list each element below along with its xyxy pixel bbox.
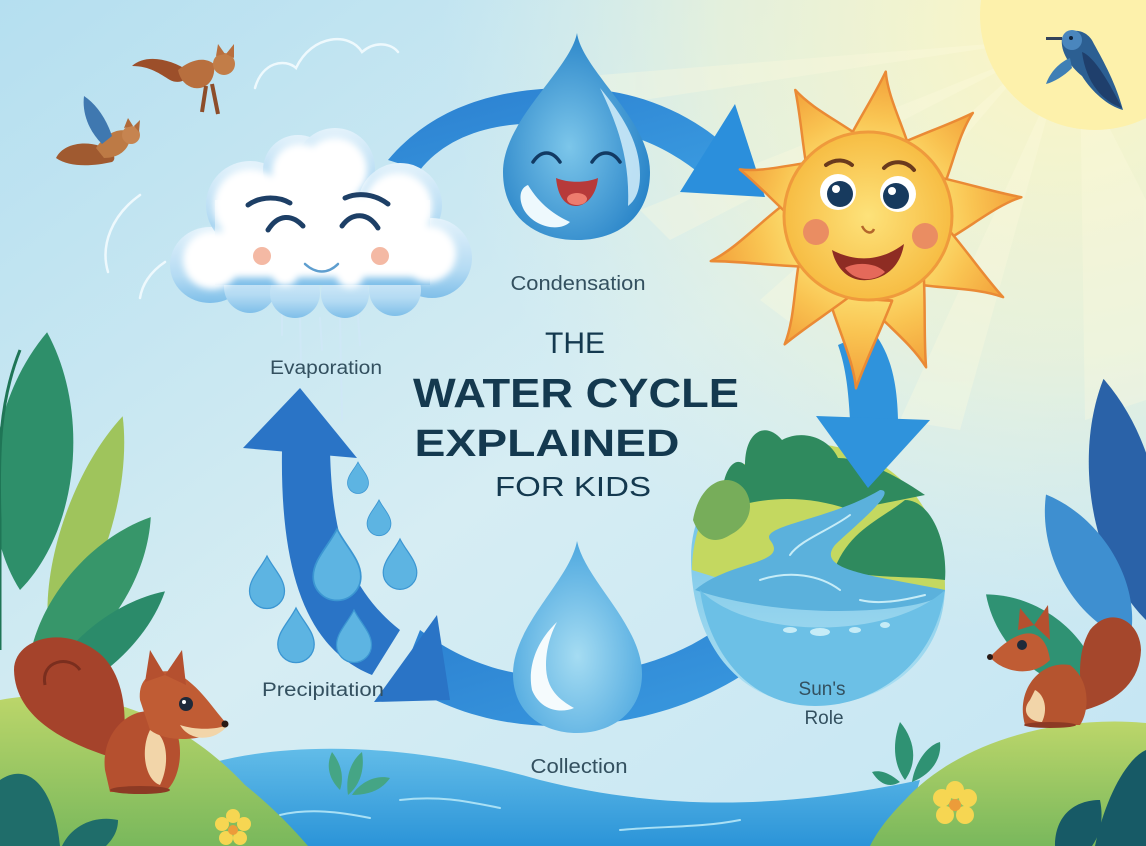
foreground: left leaves	[0, 328, 179, 716]
label: evaporation: Evaporation	[270, 358, 382, 379]
foreground: right hill	[870, 722, 1146, 846]
icon: yellow flower right	[933, 781, 977, 824]
sun rays from the corner	[600, 40, 1146, 430]
corner sun	[980, 0, 1146, 130]
foreground: left hill	[0, 695, 308, 846]
foreground: right leaves	[969, 373, 1146, 711]
icon: condensation water drop	[503, 33, 650, 240]
arrow: condensation to sun	[388, 88, 765, 197]
title: FOR KIDS	[495, 471, 651, 502]
title	[413, 327, 739, 502]
icon: yellow flower left	[215, 809, 251, 845]
label: collection: Collection	[530, 756, 628, 778]
label: condensation: Condensation	[510, 273, 646, 295]
label: sun's role: Role	[804, 708, 844, 729]
squirrel left	[14, 637, 228, 794]
wispy cloud line decoration	[106, 39, 398, 298]
icon: cloud character	[170, 128, 472, 420]
arrow: precipitation up to evaporation	[243, 388, 400, 675]
foreground: bottom water stream	[215, 749, 920, 846]
title: THE	[545, 327, 605, 360]
title: EXPLAINED	[414, 423, 680, 465]
icon: rain drops	[250, 462, 417, 663]
icon: collection water drop	[513, 541, 642, 733]
squirrel right	[987, 605, 1141, 728]
arrow: sun to river	[816, 330, 930, 488]
title: WATER CYCLE	[413, 370, 739, 416]
arrow: river to collection to precipitation	[374, 615, 775, 726]
label: sun's role: Sun's	[799, 679, 845, 700]
icon: river globe	[691, 430, 945, 706]
foreground: small plants	[0, 722, 1146, 846]
icon: flying squirrel top	[132, 44, 235, 114]
icon: flying squirrel left	[56, 96, 140, 165]
foreground: water ripple highlights	[280, 798, 740, 830]
icon: bluebird	[1046, 30, 1123, 110]
label: precipitation: Precipitation	[262, 680, 384, 701]
icon: sun character	[701, 68, 1025, 390]
